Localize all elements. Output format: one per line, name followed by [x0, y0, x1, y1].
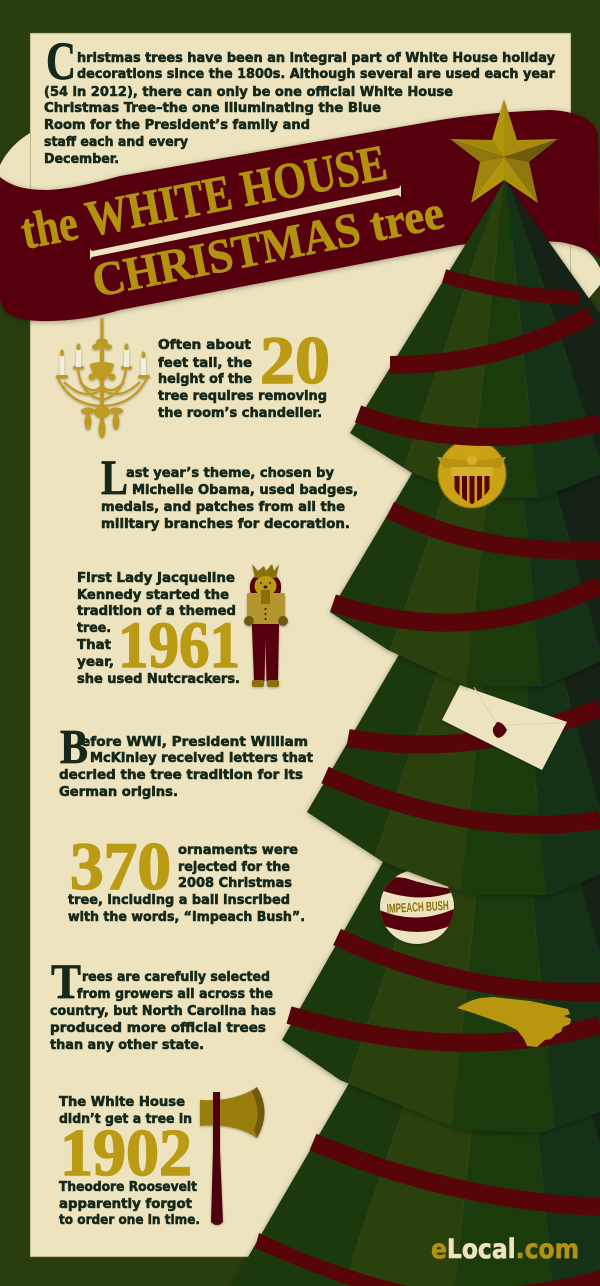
fact: 1902 no tree: to order one in time.	[59, 1213, 200, 1228]
icon: envelope	[442, 685, 567, 770]
fact: 1902 no tree	[59, 1095, 200, 1228]
garland 11 left	[255, 1233, 408, 1286]
fact: 20 feet tall	[158, 322, 330, 421]
fact: 1961 nutcrackers: tradition of a themed	[77, 604, 236, 619]
fact: trees selected from growers: rees are carefully selected	[82, 970, 270, 985]
fact: 370 ornaments	[68, 828, 305, 925]
fact: 1902 no tree: apparently forgot	[59, 1197, 192, 1212]
garland 7	[325, 775, 600, 825]
garland 9	[289, 1015, 600, 1043]
fact: last year's theme: ast year’s theme, chosen by	[126, 466, 335, 481]
garland 2	[390, 315, 590, 365]
garland 3	[358, 414, 600, 437]
fact: before WWI: B	[60, 719, 88, 774]
tree tier 1	[348, 180, 600, 500]
intro paragraph: Christmas Tree–the one illuminating the Blue	[44, 101, 381, 116]
fact: last year's theme: military branches for decoration.	[101, 517, 350, 532]
fact: 1902 no tree: 1902	[60, 1116, 192, 1190]
fact: before WWI: decried the tree tradition for its	[59, 768, 303, 783]
fact: 370 ornaments: rejected for the	[178, 860, 290, 875]
icon: military badge	[437, 440, 506, 508]
fact: trees selected from growers: than any other state.	[50, 1038, 204, 1053]
intro paragraph: December.	[44, 152, 119, 167]
intro paragraph	[44, 31, 556, 167]
fact: last year's theme	[101, 449, 358, 532]
fact: 1902 no tree: didn’t get a tree in	[59, 1112, 192, 1127]
icon: Impeach Bush ball	[380, 871, 454, 945]
garland 4	[390, 510, 600, 550]
garland 5	[333, 585, 600, 623]
icon: nutcracker	[244, 564, 288, 687]
garland 1	[444, 276, 580, 298]
garland 8	[337, 937, 600, 992]
fact: 1902 no tree: Theodore Roosevelt	[59, 1180, 197, 1195]
garland 10	[313, 1142, 600, 1207]
logo: eLocal.com: eLocal.com	[431, 1234, 579, 1265]
garland 11 right	[514, 1270, 600, 1286]
tree tier 3	[305, 620, 600, 898]
icon: chandelier	[56, 318, 150, 438]
icon: Impeach Bush ball: IMPEACH BUSH	[386, 898, 449, 916]
banner back fold right	[571, 240, 600, 303]
fact: trees selected from growers	[50, 953, 276, 1053]
fact: 1961 nutcrackers: 1961	[118, 609, 240, 682]
fact: before WWI: German origins.	[59, 785, 178, 800]
intro paragraph: Room for the President’s family and	[44, 118, 310, 133]
banner back fold left	[0, 133, 30, 190]
fact: 20 feet tall: feet tall, the	[158, 356, 252, 371]
fact: 1961 nutcrackers: First Lady Jacqueline	[77, 571, 235, 586]
fact: 20 feet tall: the room’s chandelier.	[158, 406, 322, 421]
tree tier 5	[231, 1050, 600, 1286]
fact: 370 ornaments: ornaments were	[178, 843, 298, 858]
fact: before WWI: efore WWI, President William	[81, 735, 308, 750]
icon: axe	[200, 1087, 264, 1225]
tree tier 2	[328, 416, 600, 690]
title line 2: CHRISTMAS tree	[88, 186, 448, 308]
fact: 1961 nutcrackers: tree.	[77, 621, 111, 636]
intro paragraph: C	[46, 31, 76, 91]
fact: 20 feet tall: tree requires removing	[158, 389, 327, 404]
icon: star tree topper	[450, 99, 558, 203]
fact: 20 feet tall: height of the	[158, 372, 252, 387]
intro paragraph: hristmas trees have been an integral part of White House holiday	[77, 51, 556, 66]
fact: last year's theme: Michelle Obama, used badges,	[132, 483, 358, 498]
fact: 370 ornaments: 370	[70, 828, 171, 904]
fact: 20 feet tall: 20	[260, 322, 330, 398]
intro paragraph: decorations since the 1800s. Although several are used each year	[77, 67, 556, 82]
fact: trees selected from growers: from growers all across the	[77, 987, 273, 1002]
fact: 20 feet tall: Often about	[158, 338, 251, 353]
fact: 1961 nutcrackers	[77, 571, 240, 687]
fact: 370 ornaments: 2008 Christmas	[178, 876, 292, 891]
fact: before WWI: McKinley received letters that	[90, 751, 313, 766]
fact: 1961 nutcrackers: she used Nutcrackers.	[77, 672, 240, 687]
fact: 370 ornaments: tree, including a ball inscribed	[68, 893, 290, 908]
title line 1: the WHITE HOUSE	[17, 135, 391, 261]
fact: trees selected from growers: produced more official trees	[50, 1021, 266, 1036]
title banner	[0, 110, 600, 321]
fact: trees selected from growers: country, but North Carolina has	[50, 1004, 276, 1019]
garland 6	[348, 708, 600, 745]
fact: 1961 nutcrackers: That	[77, 638, 111, 653]
fact: trees selected from growers: T	[51, 953, 81, 1009]
intro paragraph: (54 in 2012), there can only be one official White House	[44, 85, 453, 100]
fact: last year's theme: L	[101, 449, 128, 505]
tree tier 4	[280, 810, 600, 1135]
fact: last year's theme: medals, and patches from all the	[101, 500, 345, 515]
icon: North Carolina map	[457, 997, 571, 1047]
intro paragraph: staff each and every	[44, 135, 188, 150]
fact: 1961 nutcrackers: Kennedy started the	[77, 588, 229, 603]
title divider	[90, 185, 401, 260]
fact: 1961 nutcrackers: year,	[77, 655, 114, 670]
fact: 370 ornaments: with the words, “Impeach Bush”.	[68, 910, 305, 925]
fact: before WWI	[59, 719, 313, 800]
fact: 1902 no tree: The White House	[59, 1095, 185, 1110]
